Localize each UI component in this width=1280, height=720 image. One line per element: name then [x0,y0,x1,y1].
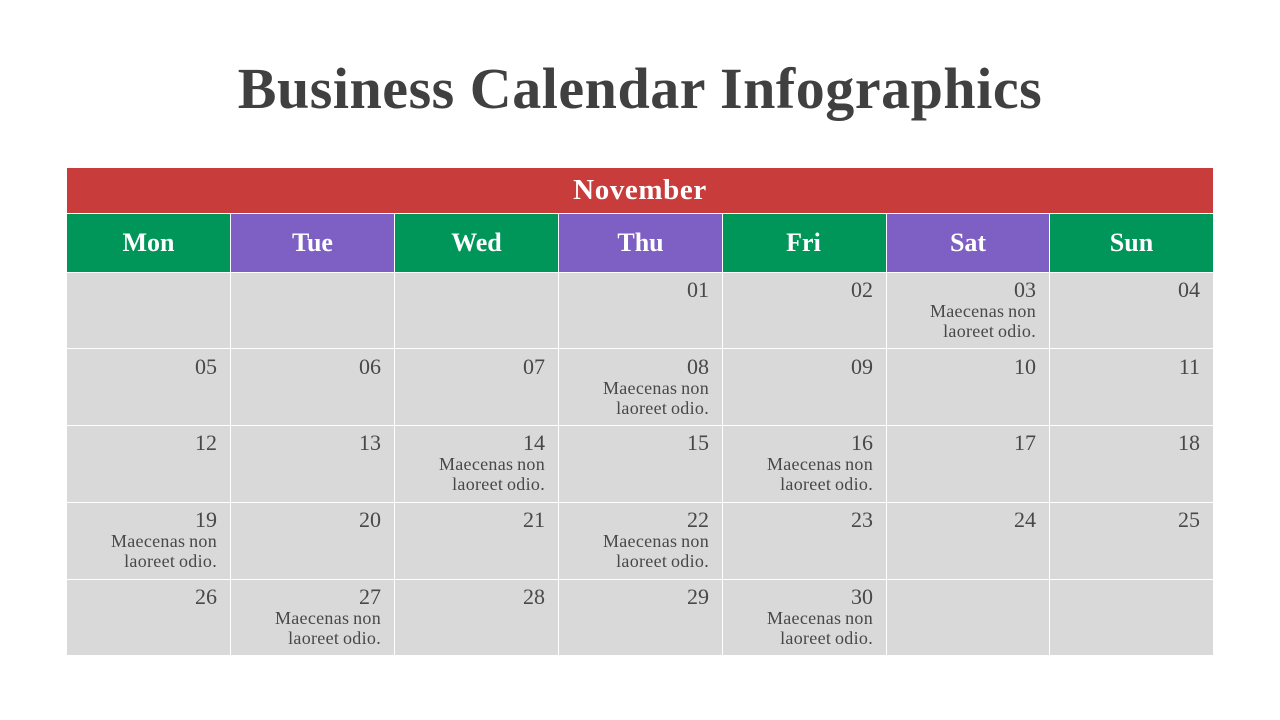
weekday header: Sun: Sun [1110,228,1153,257]
day 07 [395,349,558,425]
day 16 with note: 16 [851,430,873,455]
day 24: 24 [1014,507,1036,532]
empty cell [1050,580,1213,655]
day 07: 07 [523,354,545,379]
day 02: 02 [851,277,873,302]
day 14 with note: 14 [523,430,545,455]
day 27 with note: laoreet odio. [288,628,381,648]
day 29: 29 [687,584,709,609]
day 25: 25 [1178,507,1200,532]
day 13: 13 [359,430,381,455]
day 30 with note [723,580,886,655]
day 12 [67,426,230,502]
empty cell [887,580,1049,655]
day 22 with note: laoreet odio. [616,551,709,571]
day 17: 17 [1014,430,1036,455]
day 14 with note: Maecenas non [439,454,545,474]
day 16 with note: laoreet odio. [780,474,873,494]
day 08 with note: Maecenas non [603,378,709,398]
weekday header: Wed [395,214,558,272]
day 21: 21 [523,507,545,532]
day 01 [559,273,722,348]
day 09 [723,349,886,425]
day 09: 09 [851,354,873,379]
day 18: 18 [1178,430,1200,455]
day 22 with note: 22 [687,507,709,532]
day 15: 15 [687,430,709,455]
day 17 [887,426,1049,502]
day 23: 23 [851,507,873,532]
day 22 with note [559,503,722,579]
day 11: 11 [1179,354,1200,379]
day 01: 01 [687,277,709,302]
day 20: 20 [359,507,381,532]
day 19 with note [67,503,230,579]
day 25 [1050,503,1213,579]
title: Business Calendar Infographics [238,56,1042,121]
weekday header: Sat [887,214,1049,272]
day 30 with note: laoreet odio. [780,628,873,648]
month banner: November [573,174,707,206]
weekday header: Thu [559,214,722,272]
day 03 with note: laoreet odio. [943,321,1036,341]
day 05 [67,349,230,425]
day 06: 06 [359,354,381,379]
day 27 with note: Maecenas non [275,608,381,628]
empty cell [231,273,394,348]
weekday header: Sun [1050,214,1213,272]
day 30 with note: 30 [851,584,873,609]
day 26: 26 [195,584,217,609]
day 18 [1050,426,1213,502]
day 19 with note: Maecenas non [111,531,217,551]
month banner [67,168,1213,213]
day 14 with note [395,426,558,502]
weekday header: Fri [723,214,886,272]
weekday header: Sat: Sat [950,228,986,257]
day 24 [887,503,1049,579]
day 19 with note: laoreet odio. [124,551,217,571]
day 28: 28 [523,584,545,609]
day 03 with note: 03 [1014,277,1036,302]
day 04: 04 [1178,277,1200,302]
day 03 with note [887,273,1049,348]
day 11 [1050,349,1213,425]
day 03 with note: Maecenas non [930,301,1036,321]
day 23 [723,503,886,579]
day 13 [231,426,394,502]
day 20 [231,503,394,579]
day 19 with note: 19 [195,507,217,532]
day 22 with note: Maecenas non [603,531,709,551]
day 15 [559,426,722,502]
day 29 [559,580,722,655]
day 16 with note [723,426,886,502]
day 27 with note [231,580,394,655]
weekday header: Tue: Tue [292,228,333,257]
day 12: 12 [195,430,217,455]
weekday header: Tue [231,214,394,272]
weekday header: Thu: Thu [617,228,664,257]
day 28 [395,580,558,655]
empty cell [395,273,558,348]
weekday header: Mon: Mon [122,228,174,257]
day 21 [395,503,558,579]
day 16 with note: Maecenas non [767,454,873,474]
day 14 with note: laoreet odio. [452,474,545,494]
day 10 [887,349,1049,425]
weekday header: Wed: Wed [451,228,502,257]
day 08 with note: 08 [687,354,709,379]
day 27 with note: 27 [359,584,381,609]
day 02 [723,273,886,348]
day 04 [1050,273,1213,348]
day 08 with note: laoreet odio. [616,398,709,418]
day 08 with note [559,349,722,425]
day 10: 10 [1014,354,1036,379]
day 30 with note: Maecenas non [767,608,873,628]
day 06 [231,349,394,425]
weekday header: Fri: Fri [786,228,821,257]
empty cell [67,273,230,348]
weekday header: Mon [67,214,230,272]
day 05: 05 [195,354,217,379]
day 26 [67,580,230,655]
